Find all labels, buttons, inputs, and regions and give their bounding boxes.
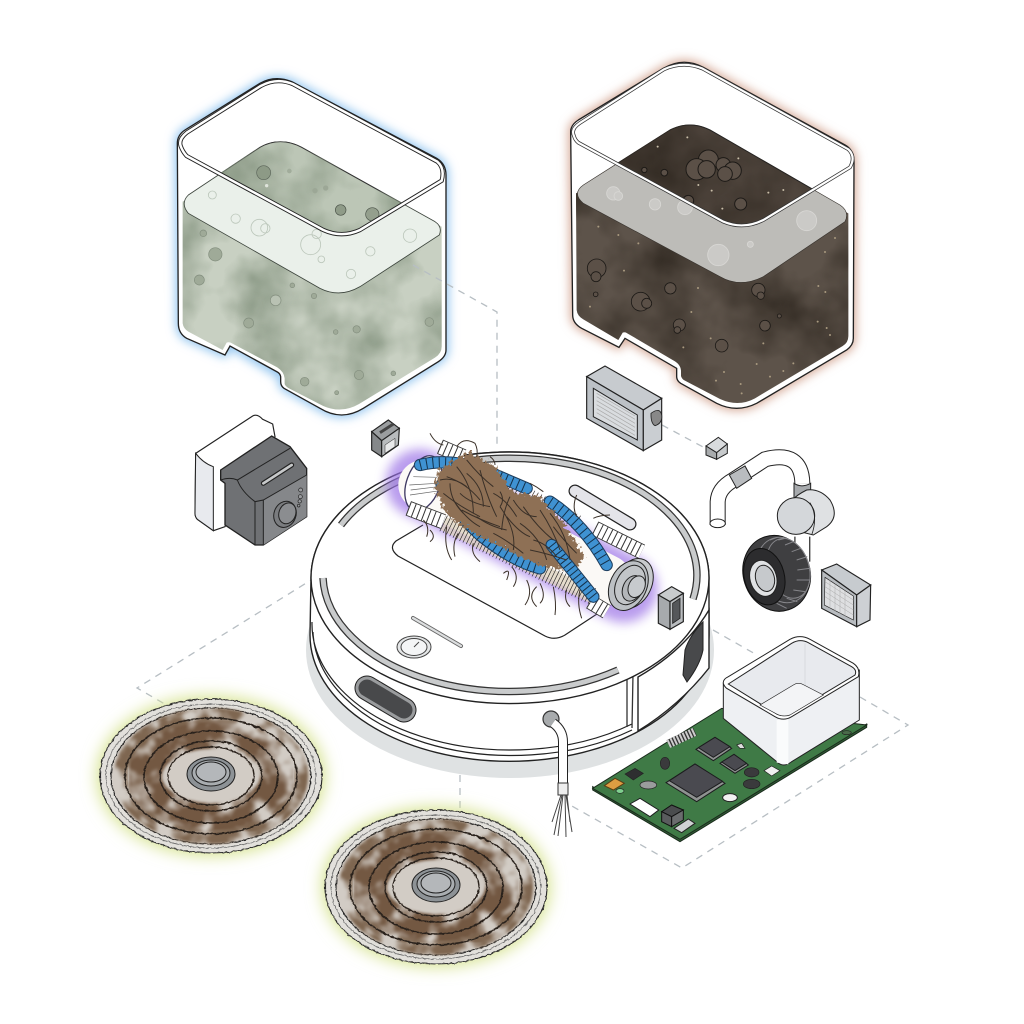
dirty water tank xyxy=(571,62,854,408)
hose xyxy=(718,457,802,525)
bristle fringe under hair xyxy=(443,483,593,597)
top edge xyxy=(311,452,709,704)
housing slot xyxy=(263,465,292,483)
board thickness xyxy=(593,724,867,842)
board top xyxy=(593,708,867,839)
bubbles on surface xyxy=(208,191,417,279)
tank rim xyxy=(180,81,443,234)
debris clumps in dirty water xyxy=(587,259,781,352)
exploded robot vacuum illustration xyxy=(86,53,909,978)
ring groove xyxy=(323,458,697,692)
small cube part xyxy=(706,437,727,459)
side sensor window xyxy=(683,622,703,682)
water surface xyxy=(184,142,440,293)
dust bin module xyxy=(195,415,307,545)
water body xyxy=(183,143,442,410)
tank shell xyxy=(177,79,446,415)
lower stem fill xyxy=(782,535,823,563)
dirty water surface xyxy=(577,125,847,282)
grey housing xyxy=(221,436,307,545)
grey front face xyxy=(263,475,307,545)
coolant box xyxy=(723,637,859,765)
bubbles in water xyxy=(194,230,434,395)
pad surface xyxy=(100,699,322,853)
second chip xyxy=(696,737,732,761)
clogged main brush roller xyxy=(398,433,661,618)
mop pad 2 xyxy=(322,807,550,967)
roller end cap xyxy=(601,552,661,617)
coin cell xyxy=(723,794,737,802)
front sensor window xyxy=(367,688,404,710)
right side block xyxy=(638,610,709,731)
brush bay panel xyxy=(392,525,600,638)
pump cylinder xyxy=(793,490,834,535)
top slot xyxy=(575,491,630,524)
white connector xyxy=(630,798,659,817)
hair strands xyxy=(423,433,610,618)
pad glow xyxy=(322,807,550,967)
square mesh filter xyxy=(822,564,871,627)
dial markers xyxy=(297,488,303,507)
indicator slot fill xyxy=(413,618,461,646)
side brush arm xyxy=(543,711,572,837)
specks xyxy=(589,226,836,394)
ribbon socket xyxy=(674,819,695,833)
sidewall xyxy=(738,544,791,610)
mop pad 1 xyxy=(97,696,325,856)
header pins xyxy=(668,732,695,744)
gold component xyxy=(604,778,624,790)
wheel hub xyxy=(753,563,777,594)
pump face xyxy=(777,498,815,534)
dial xyxy=(270,498,300,531)
dirty water body xyxy=(576,130,848,403)
hose band xyxy=(729,466,752,488)
housing edges xyxy=(221,448,307,545)
circuit board xyxy=(593,637,867,842)
back housing side xyxy=(195,453,213,531)
indicator slot xyxy=(413,618,461,646)
pump seam xyxy=(810,503,815,535)
tank rim xyxy=(573,65,853,225)
connector: second pad dashed line xyxy=(459,775,461,810)
pad glow xyxy=(97,696,325,856)
power button xyxy=(397,636,431,658)
robot side wall xyxy=(310,452,709,761)
connector: pad to robot dashed line xyxy=(137,577,316,707)
surface clumps xyxy=(607,187,817,266)
tank glow: red-brown xyxy=(571,62,854,408)
tank glow: blue xyxy=(177,79,446,415)
lower stem xyxy=(778,537,826,562)
tread xyxy=(748,530,818,610)
pad surface xyxy=(325,810,547,964)
clean water tank xyxy=(177,79,446,415)
rubber wheel xyxy=(733,527,820,620)
connector: circuit board dashed outline xyxy=(570,630,908,868)
robot vacuum body xyxy=(306,452,714,837)
third chip xyxy=(720,754,748,773)
blue blade over hair xyxy=(552,545,593,597)
tyre xyxy=(733,527,820,620)
hair tangle xyxy=(435,452,585,570)
roller left end ribs xyxy=(409,477,440,495)
small cartridge part xyxy=(372,420,399,457)
top slot fill xyxy=(575,491,630,524)
hose and pump xyxy=(710,457,834,563)
hose collar xyxy=(794,483,811,500)
bumper seam xyxy=(618,667,633,728)
tank shell xyxy=(571,62,854,408)
wheel rim xyxy=(746,557,781,599)
black socket xyxy=(662,805,683,827)
hose end xyxy=(710,519,725,528)
roller white core xyxy=(423,485,607,580)
small parts xyxy=(616,731,851,793)
exhaust filter box xyxy=(587,366,662,451)
lower trim lines xyxy=(312,622,632,756)
small clip part xyxy=(658,587,683,629)
brush glow: purple xyxy=(420,483,623,588)
dirty water seen through the opening xyxy=(618,124,812,224)
main chip xyxy=(666,764,725,802)
roller left end xyxy=(398,451,449,516)
bristle combs xyxy=(408,447,642,612)
connector: tank to robot dashed line xyxy=(413,265,497,447)
robot shadow xyxy=(306,522,714,778)
connector: filter to cube dashed line xyxy=(662,425,705,448)
blue spiral blades xyxy=(420,462,607,568)
white back housing xyxy=(195,415,275,531)
water seen through the opening xyxy=(221,142,402,232)
